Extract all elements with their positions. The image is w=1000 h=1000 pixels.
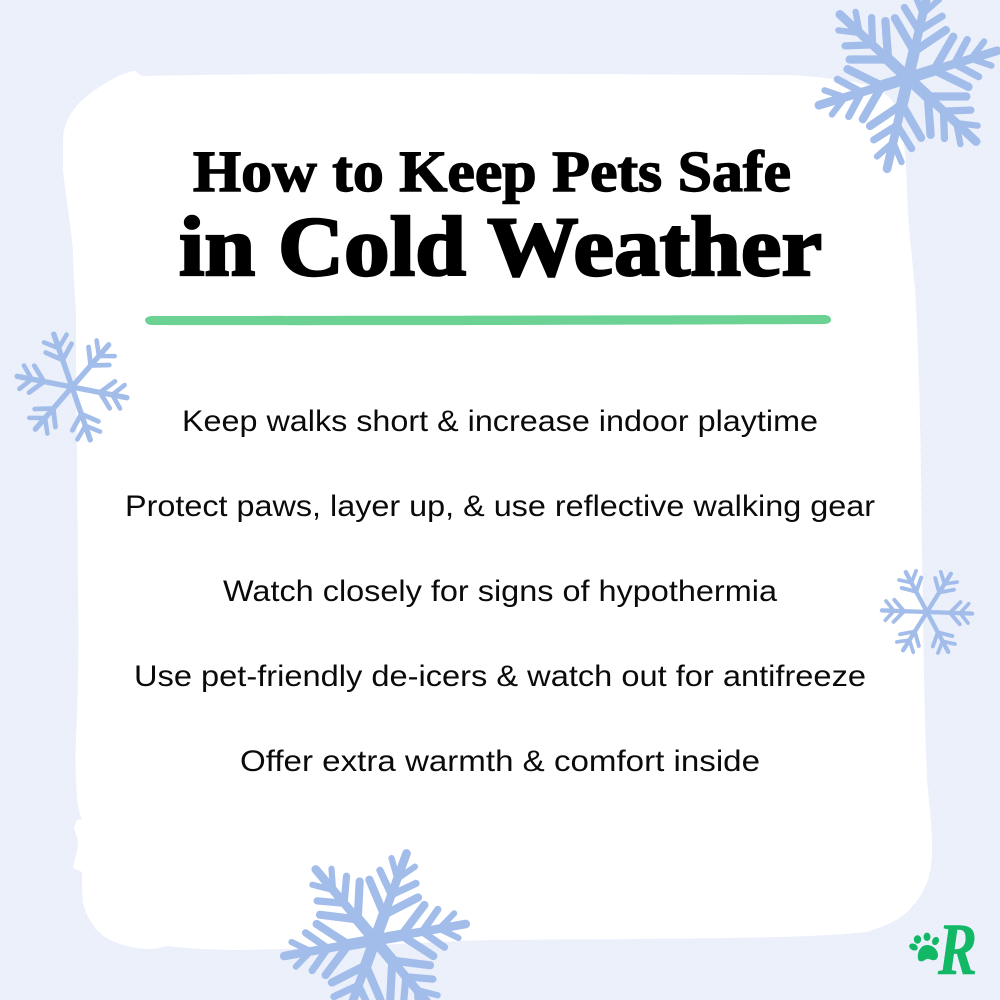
icon: paw	[908, 933, 940, 961]
title: How to Keep Pets Safe	[193, 139, 791, 204]
tip 3: Watch closely for signs of hypothermia	[223, 575, 777, 608]
tip 2: Protect paws, layer up, & use reflective walking gear	[125, 490, 875, 523]
green brush underline	[145, 315, 831, 325]
logo: paw and R	[908, 909, 977, 991]
tip 4: Use pet-friendly de-icers & watch out for antifreeze	[134, 660, 866, 693]
panel: white brush-edged card	[63, 71, 932, 950]
tips list	[125, 405, 875, 778]
icon: snowflake left	[7, 322, 137, 452]
icon: snowflake bottom	[268, 833, 482, 1000]
icon: snowflake right	[880, 566, 974, 658]
title	[179, 139, 822, 294]
title: in Cold Weather	[179, 200, 822, 294]
tip 1: Keep walks short & increase indoor playtime	[182, 405, 818, 438]
tip 5: Offer extra warmth & comfort inside	[240, 745, 760, 778]
logo letter R: R	[937, 909, 977, 991]
icon: snowflake top right	[792, 0, 1000, 195]
